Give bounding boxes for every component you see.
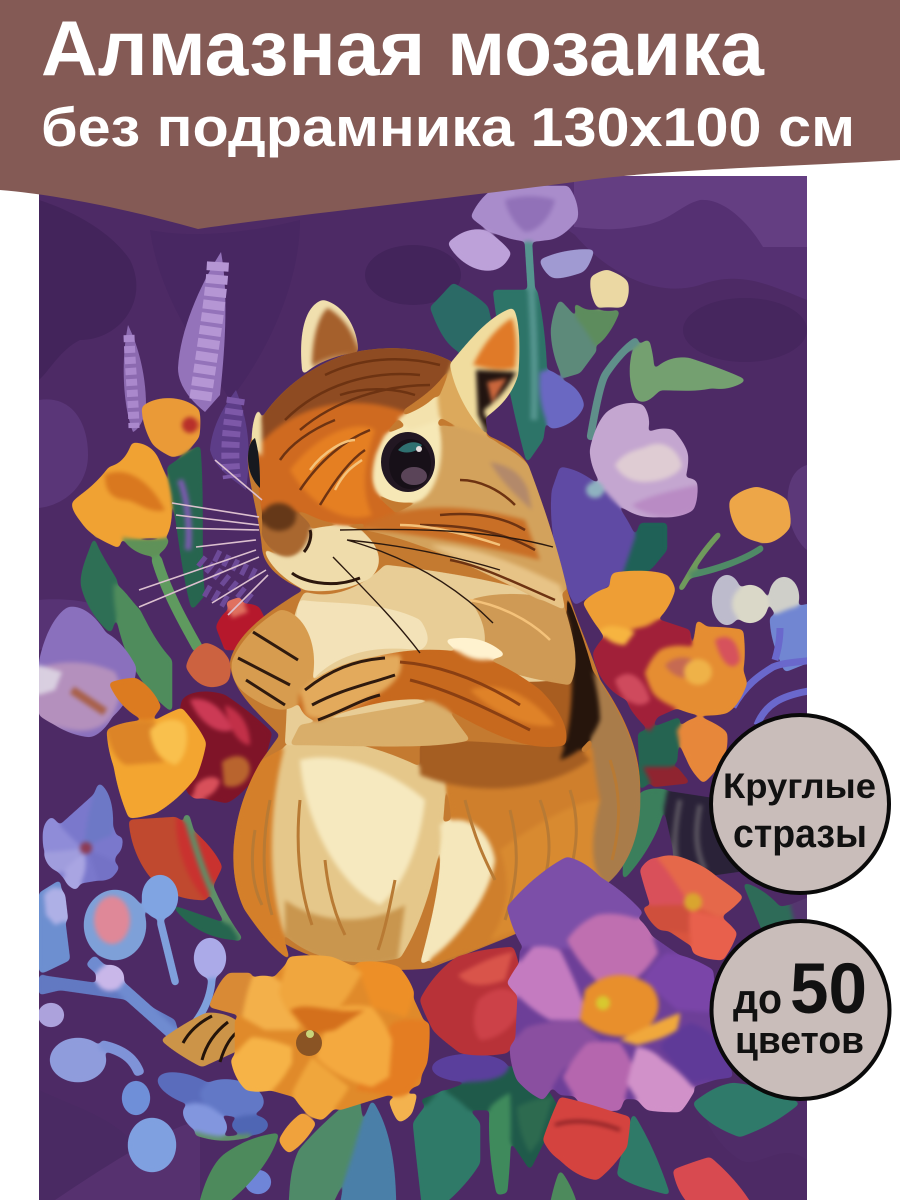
badge: round rhinestones: Круглые bbox=[723, 767, 876, 806]
header banner bbox=[0, 0, 900, 229]
bottom orange flower bbox=[209, 956, 429, 1153]
nose and mouth bbox=[292, 530, 360, 584]
bottom red rose bbox=[420, 947, 528, 1055]
right orange bud and white buds bbox=[680, 487, 815, 672]
right blue stems bbox=[734, 628, 807, 724]
squirrel lower body bbox=[234, 590, 640, 965]
left orange tulips and greenery bbox=[72, 398, 205, 712]
painting background bbox=[39, 176, 807, 1200]
squirrel chest bbox=[285, 565, 573, 745]
right lilac and blue-violet flowers bbox=[551, 403, 697, 605]
lower left blue blossoms bbox=[38, 875, 271, 1194]
badge: round rhinestones bbox=[711, 715, 889, 893]
badge: up to 50 colours: до bbox=[733, 975, 782, 1022]
lavender sprigs top left bbox=[124, 252, 249, 490]
top purple flower and plant bbox=[430, 186, 746, 463]
badge: up to 50 colours: цветов bbox=[735, 1020, 864, 1062]
red tulip at bottom bbox=[543, 1097, 630, 1180]
belly and leg fur streaks bbox=[252, 760, 619, 950]
whiskers: dark right bbox=[333, 529, 553, 653]
lavender speckle behind whiskers bbox=[200, 555, 255, 610]
squirrel body base bbox=[230, 348, 640, 970]
orange flower stamen bbox=[296, 1030, 322, 1056]
toe lines bbox=[183, 1016, 240, 1062]
red-orange flower right bbox=[640, 856, 743, 960]
badge: round rhinestones: стразы bbox=[733, 812, 867, 856]
whiskers: light left bbox=[139, 460, 268, 615]
left big orange flower bbox=[107, 678, 206, 818]
bottom leaves bbox=[199, 1054, 800, 1200]
large purple flower bbox=[507, 857, 733, 1112]
squirrel bbox=[139, 300, 640, 1067]
badge: up to 50 colours bbox=[712, 921, 890, 1099]
squirrel chest highlight bbox=[296, 600, 428, 680]
right leaf and dark fur tuft bbox=[622, 788, 807, 928]
left blue flower bbox=[43, 783, 122, 890]
title line 2: без подрамника 130х100 см bbox=[41, 96, 855, 158]
left purple flower bbox=[39, 607, 136, 737]
squirrel ears bbox=[301, 300, 358, 375]
right eye bbox=[381, 432, 435, 492]
squirrel chest right shading bbox=[470, 594, 575, 685]
title line 1: Алмазная мозаика bbox=[41, 4, 765, 92]
back leg paw bbox=[161, 1013, 239, 1067]
left red flowers bbox=[129, 597, 272, 940]
left eye sliver bbox=[248, 438, 260, 488]
right orange and red flower cluster bbox=[583, 571, 747, 790]
fur streaks on head bbox=[280, 359, 555, 600]
right ear bbox=[450, 308, 519, 437]
badge: up to 50 colours: 50 bbox=[790, 950, 867, 1029]
painting: squirrel among flowers bbox=[38, 176, 815, 1200]
squirrel paws and arm bbox=[232, 610, 566, 747]
squirrel head bbox=[248, 348, 567, 640]
